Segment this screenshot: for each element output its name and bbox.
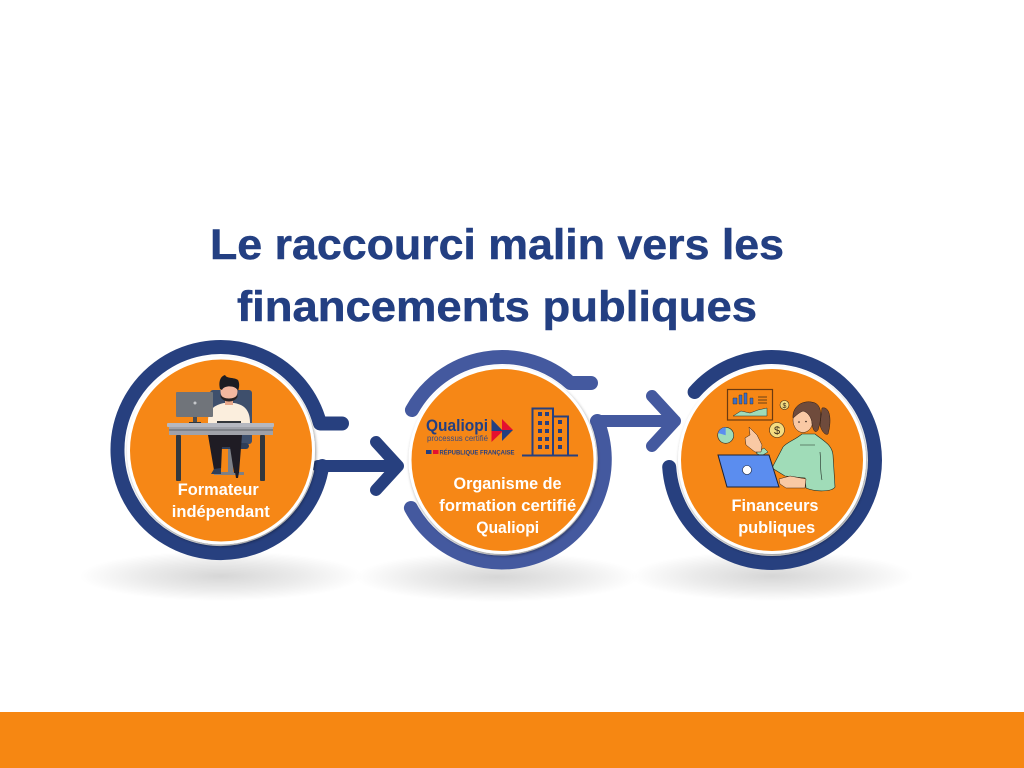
orange disc 1 [128,358,314,543]
label: Organisme de formation certifié Qualiopi: Organisme de [454,475,562,493]
orange disc 2 [410,368,595,552]
ring and arrow 1 [117,347,398,553]
logo: Qualiopi: RÉPUBLIQUE FRANÇAISE [440,448,515,456]
title: Le raccourci malin vers les [210,221,784,269]
title [210,221,784,331]
label: Organisme de formation certifié Qualiopi: Qualiopi [476,519,539,537]
label: Formateur indépendant: indépendant [172,503,270,521]
ground shadows [79,551,914,602]
label: Financeurs publiques: publiques [738,519,815,537]
icon: man at desk [167,375,274,481]
icon: woman with laptop and charts: $ [774,425,780,437]
icon: building [522,408,578,456]
label: Financeurs publiques [732,497,818,537]
label: Organisme de formation certifié Qualiopi: formation certifié [439,497,576,515]
label: Formateur indépendant [172,481,270,521]
icon: woman with laptop and charts: $ [783,403,787,410]
label: Formateur indépendant: Formateur [178,481,259,499]
logo: Qualiopi [426,416,515,456]
orange disc 3 [680,368,864,552]
step 1: formateur indépendant [117,347,398,553]
step 2: organisme de formation certifié Qualiopi [410,357,675,562]
icon: woman with laptop and charts [718,390,835,491]
title: financements publiques [237,283,757,331]
logo: Qualiopi: Qualiopi [426,416,488,435]
ring and arrow 2 [411,357,675,562]
ring 3 [669,357,875,563]
logo: Qualiopi: processus certifié [427,433,488,443]
step 3: financeurs publiques [669,357,875,563]
label: Financeurs publiques: Financeurs [732,497,818,515]
footer band [0,712,1024,768]
label: Organisme de formation certifié Qualiopi [439,475,576,537]
